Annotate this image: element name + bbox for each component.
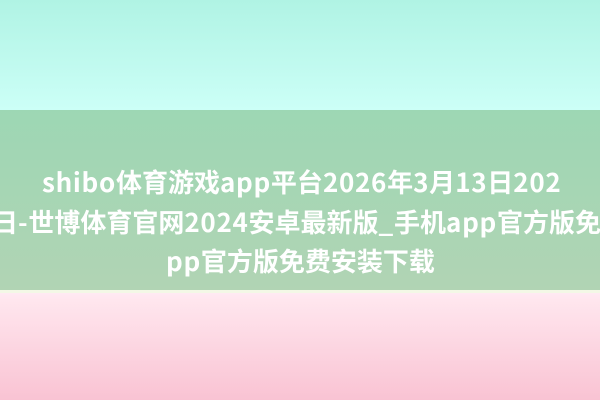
title text: pp官方版免费安装下载	[166, 242, 435, 279]
pale strip below band	[0, 290, 600, 293]
title text: shibo体育游戏app平台2026年3月13日202	[42, 163, 561, 200]
title text	[0, 163, 600, 279]
green title band	[0, 110, 600, 290]
